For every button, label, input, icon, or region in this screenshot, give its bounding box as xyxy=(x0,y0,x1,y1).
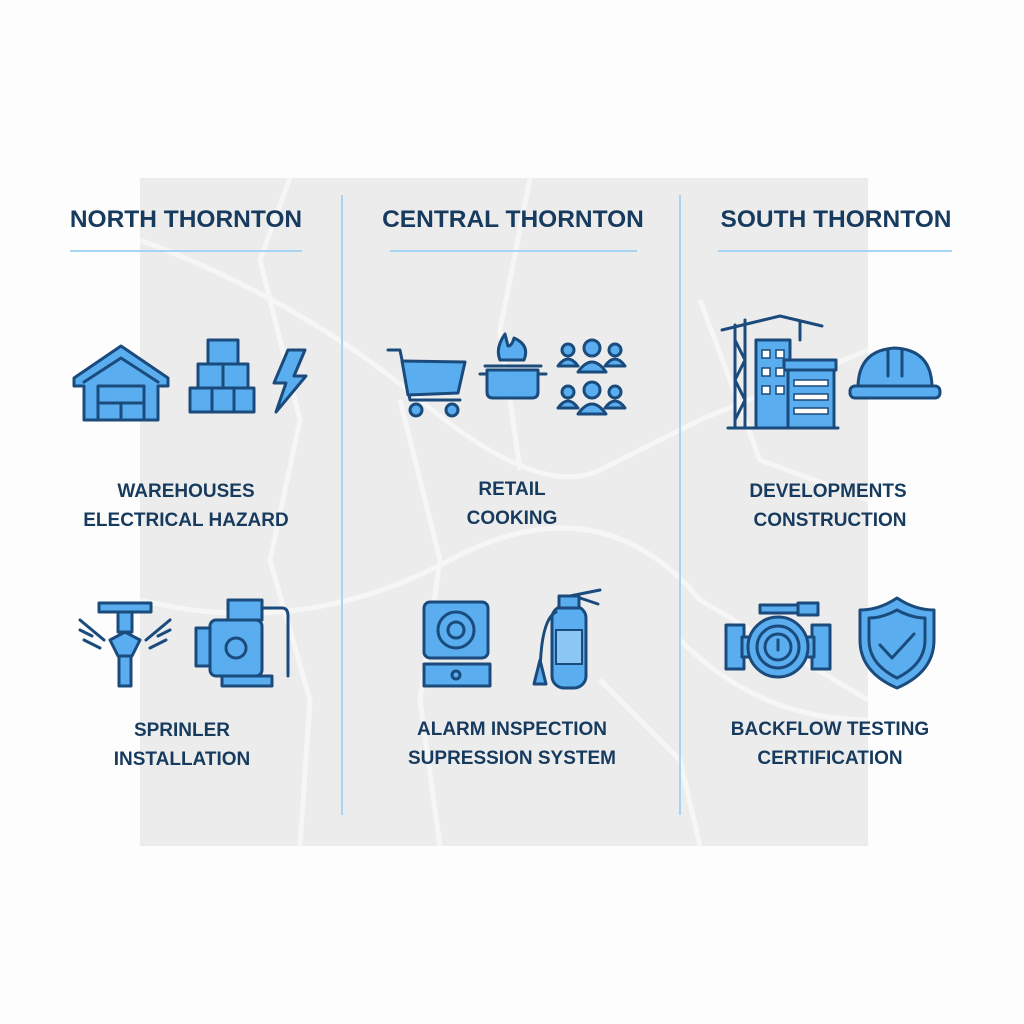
icon: warehouse xyxy=(74,346,168,420)
icon: pot with fire xyxy=(480,334,546,398)
text: south services xyxy=(731,719,929,769)
text: north issues: WAREHOUSES xyxy=(117,481,255,502)
text: central services xyxy=(408,719,616,769)
icon: construction building xyxy=(722,316,838,428)
text: central issues xyxy=(467,479,557,529)
text: central issues: RETAIL xyxy=(478,479,546,500)
icon: cart xyxy=(388,350,465,416)
text: south services: BACKFLOW TESTING xyxy=(731,719,929,740)
text: north services: SPRINLER xyxy=(134,720,230,741)
icon: shield check xyxy=(860,598,934,688)
text: north issues: ELECTRICAL HAZARD xyxy=(83,510,289,531)
text: north services: INSTALLATION xyxy=(114,749,250,770)
text: central services: SUPRESSION SYSTEM xyxy=(408,748,616,769)
heading: north: NORTH THORNTON xyxy=(70,206,302,233)
icon: sprinkler xyxy=(80,603,170,686)
text: south issues xyxy=(749,481,907,531)
icon: fire extinguisher xyxy=(534,590,600,688)
icon: alarm panel xyxy=(424,602,490,686)
icon: pump xyxy=(196,600,288,686)
icon: hard hat xyxy=(850,348,940,398)
heading: south: SOUTH THORNTON xyxy=(721,206,951,233)
text: north issues xyxy=(83,481,289,531)
text: central services: ALARM INSPECTION xyxy=(417,719,607,740)
icon: boxes xyxy=(190,340,254,412)
text: south issues: DEVELOPMENTS xyxy=(749,481,907,502)
heading: central: CENTRAL THORNTON xyxy=(382,206,644,233)
text: north services xyxy=(114,720,250,770)
text: central issues: COOKING xyxy=(467,508,557,529)
panel: central thornton xyxy=(382,206,644,769)
panel: south thornton xyxy=(718,206,952,769)
text: south issues: CONSTRUCTION xyxy=(753,510,907,531)
column dividers xyxy=(342,195,680,815)
text: south services: CERTIFICATION xyxy=(757,748,903,769)
icon: lightning xyxy=(274,350,306,412)
icon: people xyxy=(558,340,625,414)
map background xyxy=(140,178,868,846)
icon: backflow valve xyxy=(726,603,830,677)
panel: north thornton xyxy=(70,206,306,770)
